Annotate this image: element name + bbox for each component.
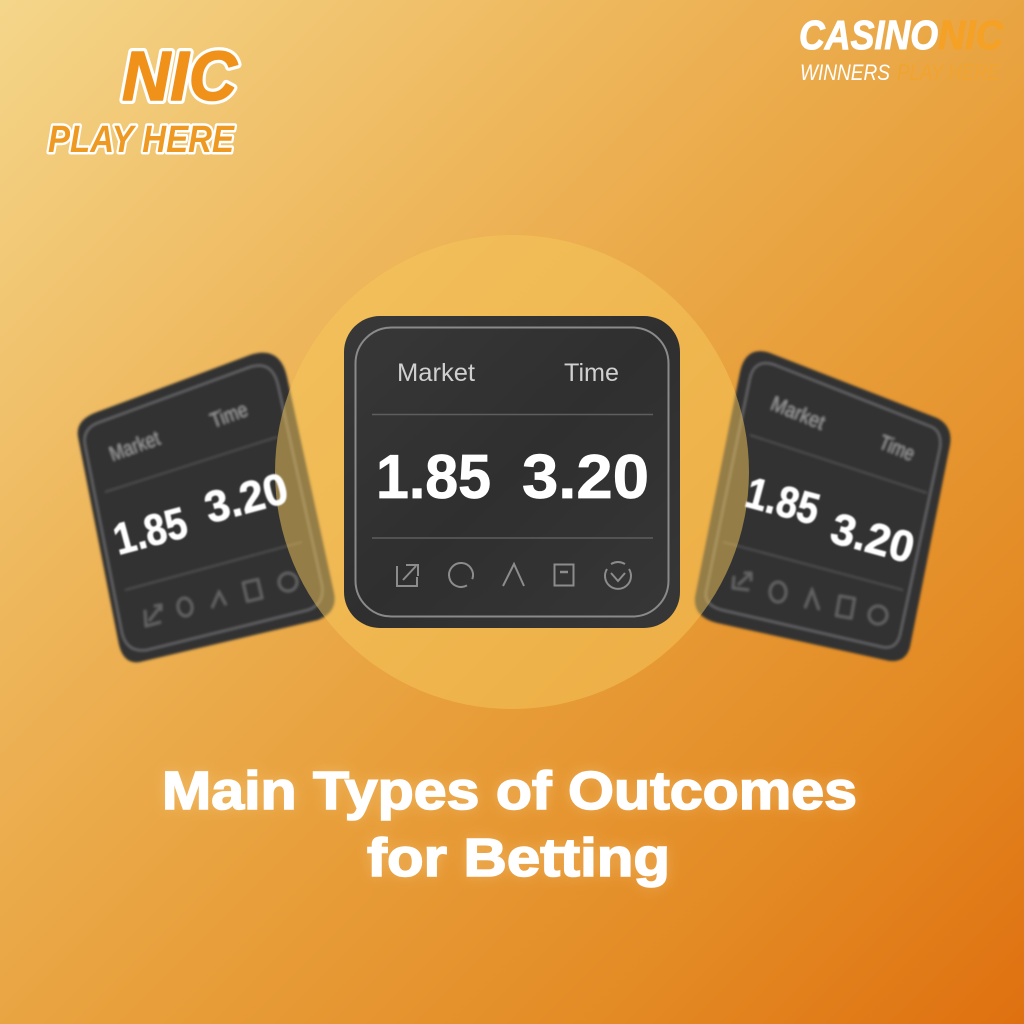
logo: top-left NIC PLAY HERE: PLAY HERE [48, 119, 235, 161]
time label: Time [564, 359, 619, 387]
center odds card [344, 316, 680, 628]
left tilted odds card: Market [106, 427, 163, 466]
title: Main Types of Outcomes [162, 761, 857, 821]
logo: top-left NIC PLAY HERE: NIC [122, 37, 238, 115]
right card odds values [741, 468, 920, 573]
logo: top-right CASINONIC: CASINO [799, 12, 938, 58]
title [162, 761, 857, 888]
left card odds values: 1.85 [108, 498, 192, 565]
left card odds values: 3.20 [199, 464, 293, 533]
odds 3.20: 3.20 [522, 443, 649, 512]
translucent spotlight circle [275, 235, 749, 709]
left tilted odds card: Time [207, 398, 251, 433]
right tilted odds card: Time [876, 431, 918, 466]
title: for Betting [367, 828, 670, 888]
logo: top-left NIC PLAY HERE: PLAY HERE [48, 119, 235, 161]
right card odds values: 3.20 [826, 504, 920, 573]
right tilted odds card [695, 351, 950, 661]
logo: top-left NIC PLAY HERE [48, 37, 238, 161]
logo: top-left NIC PLAY HERE: NIC [122, 37, 238, 115]
logo: top-right CASINONIC: WINNERS [800, 60, 890, 85]
right tilted odds card: Market [768, 392, 828, 435]
left tilted odds card [78, 353, 335, 662]
logo: top-right CASINONIC: PLAY HERE [897, 60, 1000, 85]
logo: top-right CASINONIC [799, 12, 1004, 85]
right card odds values: 1.85 [741, 468, 825, 535]
market label: Market [397, 359, 475, 387]
logo: top-right CASINONIC: NIC [938, 12, 1004, 58]
title: Main Types of Outcomes [162, 761, 857, 821]
icon row [397, 562, 631, 589]
odds 1.85: 1.85 [376, 443, 491, 512]
title: for Betting [367, 828, 670, 888]
left card odds values [108, 464, 293, 565]
